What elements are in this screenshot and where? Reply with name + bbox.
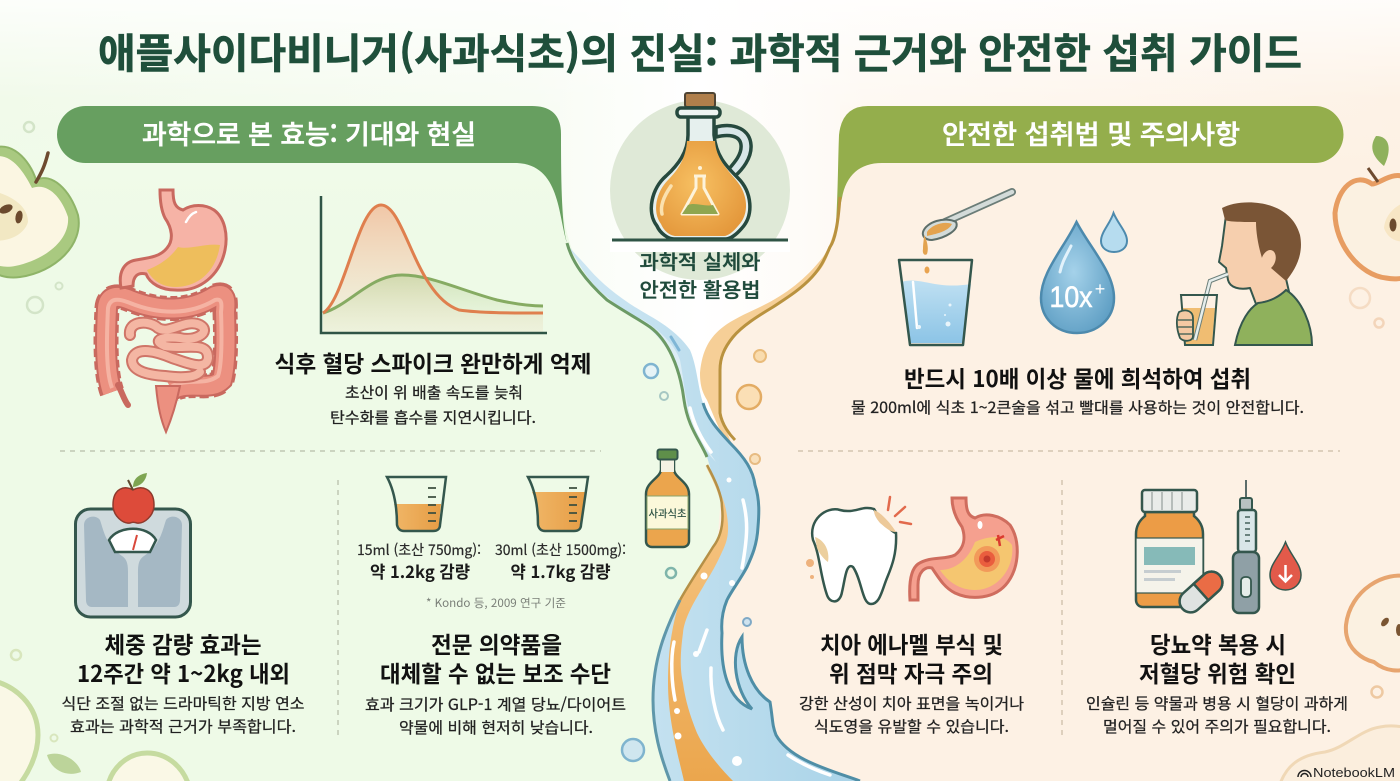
text: weight loss: 12주간 약 1~2kg 내외 <box>77 655 290 689</box>
icon: low blood sugar drop <box>1270 542 1301 590</box>
footnote: * Kondo 등, 2009 연구 기준 <box>426 595 566 611</box>
decorative apple: bottom left <box>0 680 190 781</box>
icon: irritated stomach <box>910 498 1017 600</box>
text: not a medicine: 약물에 비해 현저히 낮습니다. <box>399 716 593 738</box>
title: 애플사이다비니거(사과식초)의 진실: 과학적 근거와 안전한 섭취 가이드 <box>98 20 1302 80</box>
caption: central: 과학적 실체와 <box>640 246 760 275</box>
header: right section: 안전한 섭취법 및 주의사항 <box>942 113 1240 152</box>
text: hypoglycemia: 당뇨약 복용 시 <box>1150 626 1286 660</box>
decorative apple: lower right <box>1346 576 1400 670</box>
icon: person drinking through straw <box>1177 202 1312 345</box>
text: not a medicine <box>365 626 626 738</box>
text: not a medicine: 효과 크기가 GLP-1 계열 당뇨/다이어트 <box>365 693 626 715</box>
icon: insulin pen <box>1233 480 1259 613</box>
watermark: NotebookLM: NotebookLM <box>1313 765 1395 780</box>
icon: medicine bottle and capsule <box>1136 490 1227 617</box>
text: hypoglycemia <box>1086 626 1348 737</box>
caption: central: 안전한 활용법 <box>640 274 760 303</box>
caption: central <box>640 246 760 303</box>
text: dilute with water: 반드시 10배 이상 물에 희석하여 섭취 <box>904 360 1251 394</box>
icon: flask-marked vinegar jug <box>610 93 790 280</box>
panel: right background <box>700 100 1400 781</box>
text: enamel and mucosa: 치아 에나멜 부식 및 <box>820 626 1003 660</box>
decorative apple: top right <box>1335 136 1400 279</box>
text: dilute with water <box>851 360 1304 418</box>
text: not a medicine: 대체할 수 없는 보조 수단 <box>380 655 611 689</box>
chart: post-meal glucose curves <box>321 196 547 333</box>
label: 15ml result: 약 1.2kg 감량 <box>370 558 470 583</box>
text: weight loss <box>62 626 304 737</box>
icon: 10x water drop <box>1041 213 1127 333</box>
decorative apple: bottom right <box>1278 726 1400 781</box>
icon: measuring cup 30ml <box>528 477 588 531</box>
text: enamel and mucosa: 강한 산성이 치아 표면을 녹이거나 <box>799 692 1024 714</box>
label: 15ml result: 15ml (초산 750mg): <box>357 540 481 560</box>
icon: spoon pouring into glass <box>899 192 1012 345</box>
text: glucose spike <box>274 345 592 428</box>
icon: apple on bathroom scale <box>76 473 190 617</box>
central stream: apple vinegar and water <box>567 197 860 781</box>
text: glucose spike: 초산이 위 배출 속도를 늦춰 <box>345 381 523 403</box>
header: left section: 과학으로 본 효능: 기대와 현실 <box>142 113 476 152</box>
text: enamel and mucosa: 위 점막 자극 주의 <box>829 655 993 689</box>
text: glucose spike: 탄수화를 흡수를 지연시킵니다. <box>330 406 536 428</box>
header: right section <box>836 106 1344 224</box>
header: left section <box>57 106 567 243</box>
text: hypoglycemia: 멀어질 수 있어 주의가 필요합니다. <box>1103 715 1331 737</box>
icon: 10x water drop: 10x <box>1050 281 1092 314</box>
text: not a medicine: 전문 의약품을 <box>431 626 562 660</box>
text: hypoglycemia: 저혈당 위험 확인 <box>1139 655 1296 689</box>
text: weight loss: 식단 조절 없는 드라마틱한 지방 연소 <box>62 692 304 714</box>
label: 30ml result: 30ml (초산 1500mg): <box>495 540 626 560</box>
label: 30ml result: 약 1.7kg 감량 <box>510 558 611 583</box>
label: 30ml result <box>495 540 626 583</box>
decorative leaf <box>47 754 81 774</box>
text: glucose spike: 식후 혈당 스파이크 완만하게 억제 <box>274 345 592 379</box>
panel: left background <box>0 100 723 781</box>
icon: digestive system <box>106 190 226 432</box>
icon: vinegar bottle <box>646 450 689 547</box>
label: 15ml result <box>357 540 481 583</box>
text: enamel and mucosa <box>799 626 1024 737</box>
icon: eroded tooth <box>806 497 911 604</box>
icon: vinegar bottle: 사과식초 <box>648 506 687 521</box>
text: weight loss: 체중 감량 효과는 <box>104 626 262 660</box>
icon: measuring cup 15ml <box>387 477 446 531</box>
text: hypoglycemia: 인슐린 등 약물과 병용 시 혈당이 과하게 <box>1086 692 1348 714</box>
icon: 10x water drop: + <box>1095 279 1105 299</box>
text: enamel and mucosa: 식도영을 유발할 수 있습니다. <box>814 715 1009 737</box>
text: dilute with water: 물 200ml에 식초 1~2큰술을 섞고 빨대를 사용하는 것이 안전합니다. <box>851 396 1304 418</box>
text: weight loss: 효과는 과학적 근거가 부족합니다. <box>70 715 296 737</box>
decorative apple: top left <box>0 147 79 277</box>
